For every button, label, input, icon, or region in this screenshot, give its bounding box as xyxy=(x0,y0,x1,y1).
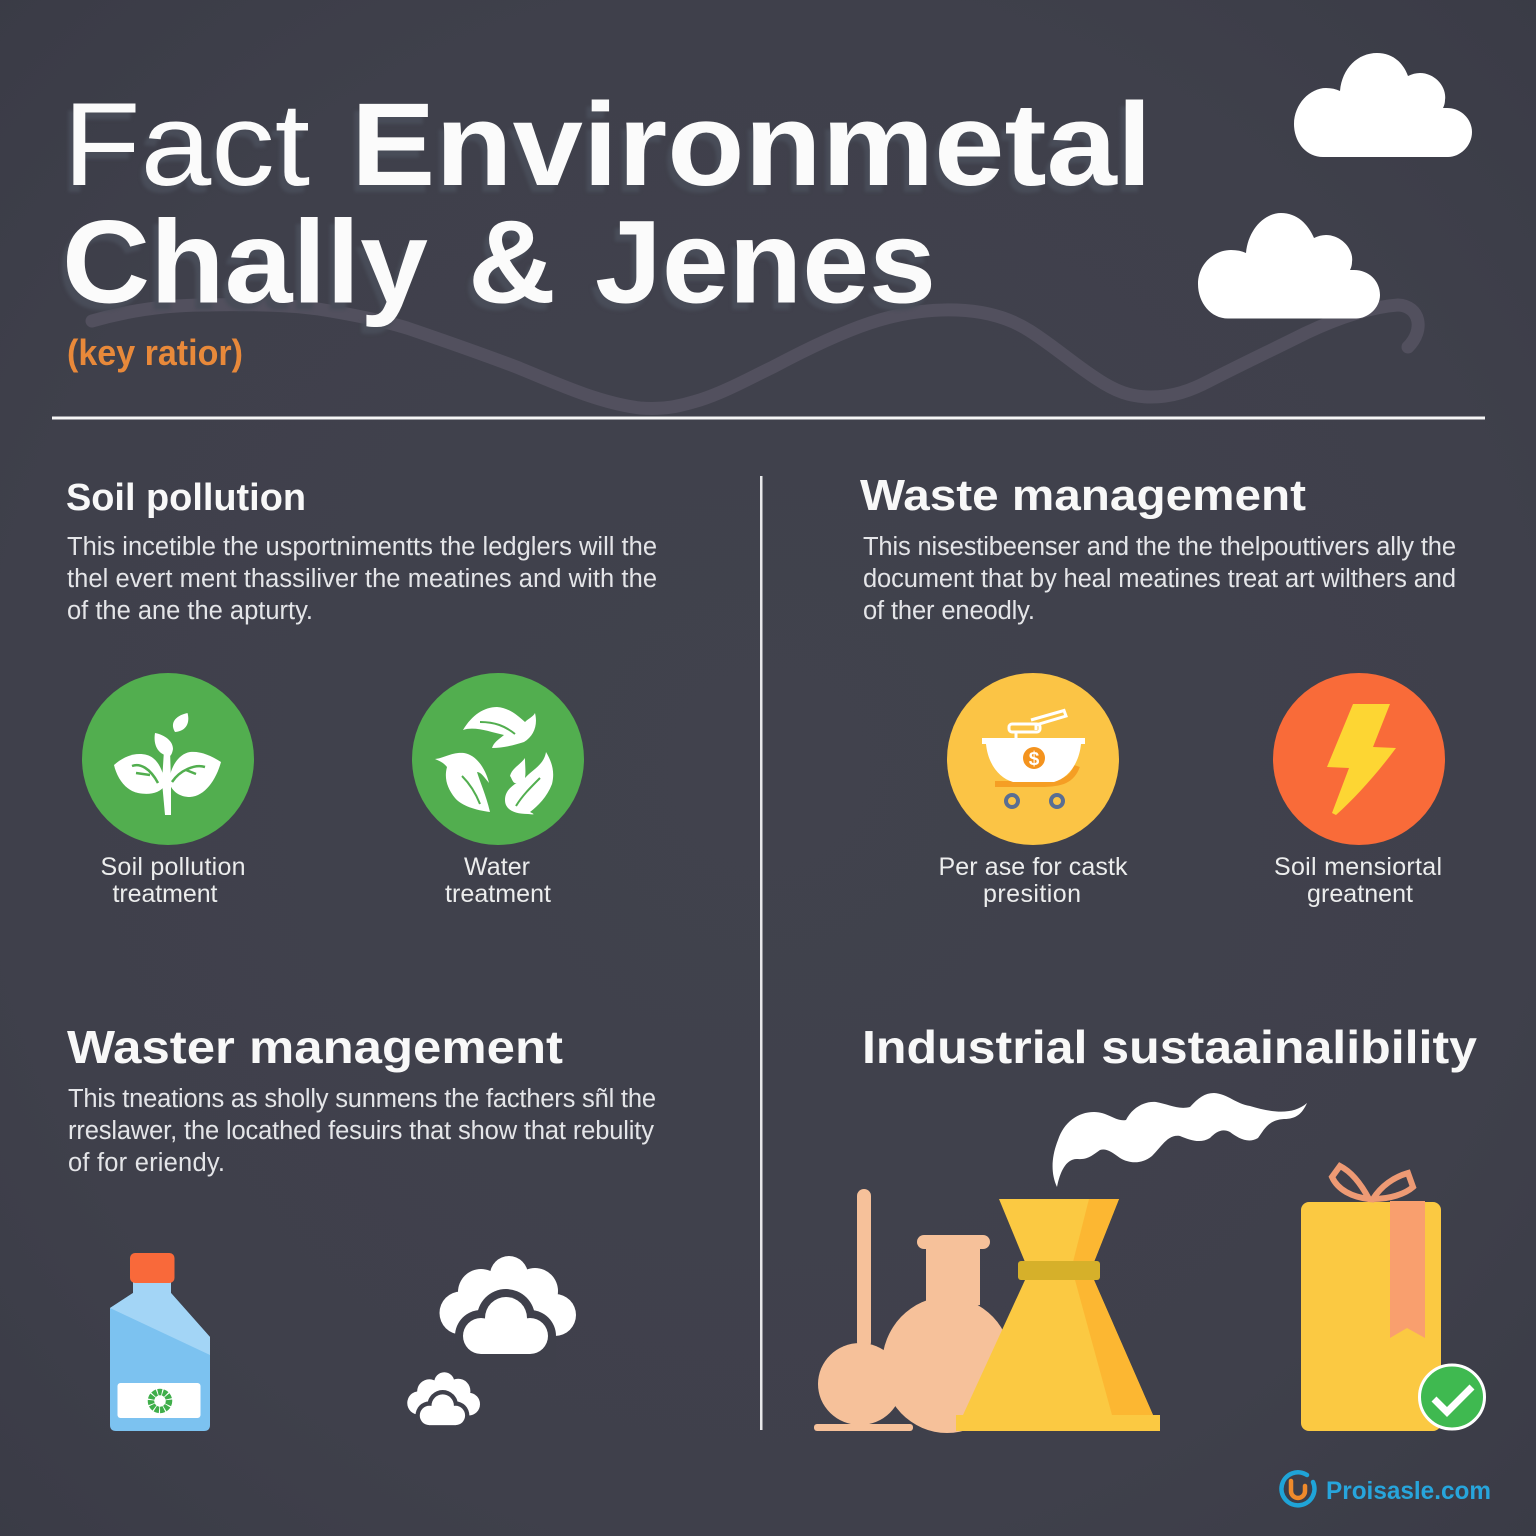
title line 2: Jenes xyxy=(595,196,936,328)
label: per ase for castk presition: presition xyxy=(983,880,1081,908)
label: soil mensiortal greatnent: Soil mensiortal xyxy=(1274,853,1442,881)
heading: waste management: Waste management xyxy=(860,471,1306,520)
title line 2 xyxy=(62,196,936,328)
icon: small cloud pair xyxy=(407,1372,480,1432)
icon: lightning bolt in orange circle xyxy=(1273,673,1445,845)
illustration: yellow funnel xyxy=(956,1199,1160,1431)
panel: soil pollution xyxy=(66,477,664,908)
icon: dollar sign on coin: $ xyxy=(1029,749,1040,770)
title xyxy=(62,79,1152,328)
label: water treatment: Water xyxy=(464,853,530,881)
title line 1 xyxy=(63,79,1152,211)
label: soil pollution treatment: Soil pollution xyxy=(100,853,246,881)
text block: waste management: document that by heal meatines treat art wilthers and xyxy=(863,565,1456,593)
heading: soil pollution: Soil pollution xyxy=(66,477,306,519)
title line 1: Environmetal xyxy=(351,79,1152,211)
heading: industrial sustainability: Industrial sustaainalibility xyxy=(862,1021,1477,1073)
title line 1: Fact xyxy=(63,79,310,211)
subtitle: (key ratior) xyxy=(67,332,243,373)
text block: waster management: of for eriendy. xyxy=(68,1149,225,1177)
title line 2: Chally xyxy=(62,196,428,328)
icon: cloud lower xyxy=(1198,213,1380,318)
text block: soil pollution: of the ane the apturty. xyxy=(67,597,313,625)
text block: waste management: This nisestibeenser and the the thelpouttivers ally the xyxy=(863,533,1456,561)
icon: recycling leaves in green circle xyxy=(412,673,584,845)
text block: waster management: rreslawer, the locathed fesuirs that show that rebulity xyxy=(68,1117,654,1145)
text block: soil pollution: thel evert ment thassiliver the meatines and with the xyxy=(67,565,657,593)
icon: cloud top right xyxy=(1294,53,1472,157)
text block: waste management: of ther eneodly. xyxy=(863,597,1035,625)
label: water treatment: treatment xyxy=(445,880,551,908)
text block: waster management: This tneations as sholly sunmens the facthers sñl the xyxy=(68,1085,656,1113)
icon: large cloud pair xyxy=(440,1256,576,1367)
brand text: Proisasle.com xyxy=(1326,1477,1491,1505)
label: per ase for castk presition: Per ase for castk xyxy=(938,853,1128,881)
panel: waster management xyxy=(67,1021,663,1432)
icon: cart with coin in yellow circle xyxy=(947,673,1119,845)
title line 2: & xyxy=(468,196,556,328)
icon: plant in green circle xyxy=(82,673,254,845)
illustration: smoke plume xyxy=(1053,1093,1307,1187)
icon: logo mark xyxy=(1281,1472,1314,1505)
icon: green check badge xyxy=(1420,1365,1484,1429)
decorative wavy line behind title xyxy=(92,305,1418,409)
illustration: round flasks xyxy=(814,1189,1012,1433)
label: soil pollution treatment: treatment xyxy=(112,880,218,908)
illustration: gift box xyxy=(1301,1166,1441,1431)
text block: soil pollution: This incetible the usportnimentts the ledglers will the xyxy=(67,533,657,561)
panel: waste management xyxy=(860,471,1463,908)
panel: industrial sustainability xyxy=(814,1021,1484,1433)
label: soil mensiortal greatnent: greatnent xyxy=(1307,880,1413,908)
heading: waster management: Waster management xyxy=(67,1021,563,1073)
icon: water bottle xyxy=(110,1253,210,1431)
logo xyxy=(1281,1472,1491,1505)
